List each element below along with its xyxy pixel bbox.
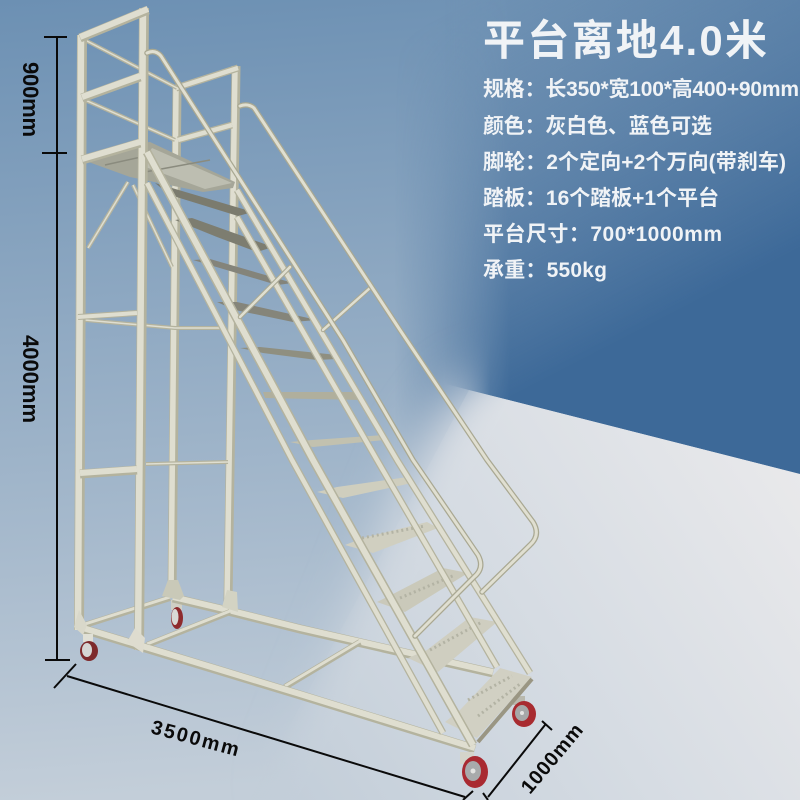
label: 4000mm: 4000mm bbox=[18, 335, 43, 423]
label: 900mm: 900mm bbox=[18, 62, 43, 137]
dimension: height lines bbox=[42, 37, 70, 660]
spec: colour: 颜色：灰白色、蓝色可选 bbox=[483, 115, 712, 138]
front caster bbox=[80, 634, 98, 661]
platform deck bbox=[83, 142, 235, 192]
background: wall edge above floor bbox=[455, 334, 800, 474]
back handrail bbox=[240, 105, 536, 592]
dimension: length line bbox=[54, 664, 473, 800]
label: 1000mm: 1000mm bbox=[517, 720, 588, 798]
main front caster bbox=[460, 752, 488, 788]
frame: rear posts and base bbox=[85, 40, 493, 687]
label: 3500mm: 3500mm bbox=[149, 717, 241, 761]
frame: front posts and base bbox=[74, 8, 475, 749]
title: 平台离地4.0米 bbox=[483, 17, 767, 64]
handrail braces bbox=[240, 267, 370, 330]
right rear caster bbox=[512, 696, 536, 727]
spec: platform size: 平台尺寸：700*1000mm bbox=[483, 222, 722, 246]
spec: treads: 踏板：16个踏板+1个平台 bbox=[483, 186, 719, 210]
front stair stringers bbox=[147, 152, 473, 745]
rear caster bbox=[171, 600, 183, 629]
spec: load: 承重：550kg bbox=[483, 259, 607, 282]
stair treads bbox=[155, 183, 532, 742]
rear stair stringers bbox=[237, 190, 530, 673]
spec: size: 规格：长350*宽100*高400+90mm bbox=[483, 77, 799, 101]
background: pale floor bbox=[401, 390, 800, 800]
spec: casters: 脚轮：2个定向+2个万向(带刹车) bbox=[483, 150, 786, 174]
front handrail bbox=[147, 52, 481, 636]
background: soft floor glow bbox=[280, 365, 790, 790]
dimension: width line bbox=[483, 721, 552, 800]
